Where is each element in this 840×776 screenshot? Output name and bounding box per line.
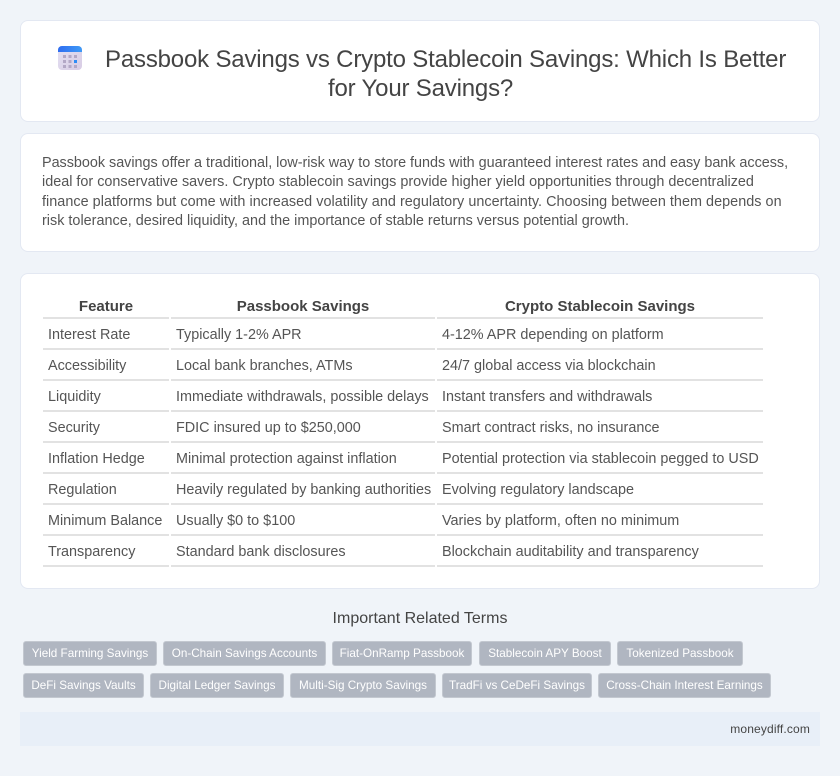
row: regulation: Heavily regulated by banking authorities (176, 482, 431, 498)
table header: Feature (79, 298, 133, 315)
row: interest rate: 4-12% APR depending on platform (442, 327, 664, 343)
row: accessibility: Local bank branches, ATMs (176, 358, 353, 374)
row: minimum balance: Usually $0 to $100 (176, 513, 295, 529)
tag: Fiat-OnRamp Passbook (340, 647, 464, 660)
row: transparency: Standard bank disclosures (176, 544, 346, 560)
row: interest rate: Interest Rate (48, 327, 130, 343)
row: accessibility: Accessibility (48, 358, 126, 374)
row: liquidity: Liquidity (48, 389, 101, 405)
row: liquidity: Immediate withdrawals, possible delays (176, 389, 429, 405)
intro panel (20, 133, 820, 252)
row: liquidity: Instant transfers and withdrawals (442, 389, 652, 405)
row: transparency (48, 544, 699, 560)
tag: Digital Ledger Savings (159, 679, 275, 692)
tag: Tokenized Passbook (626, 647, 734, 660)
row: minimum balance: Varies by platform, often no minimum (442, 513, 679, 529)
intro text: ideal for conservative savers. Crypto stablecoin savings provide higher yield opportunities through decentralized (42, 174, 754, 190)
row: security: Security (48, 420, 100, 436)
row: transparency: Transparency (48, 544, 135, 560)
tag: Multi-Sig Crypto Savings (299, 679, 427, 692)
row: inflation hedge: Inflation Hedge (48, 451, 145, 467)
row: liquidity (48, 389, 652, 405)
intro text (42, 155, 788, 229)
related terms tags (23, 641, 771, 698)
tag (290, 673, 436, 698)
tag (332, 641, 472, 666)
tag: DeFi Savings Vaults (31, 679, 136, 692)
tag (479, 641, 611, 666)
row: transparency: Blockchain auditability and transparency (442, 544, 699, 560)
row: accessibility (48, 358, 656, 374)
tag (598, 673, 771, 698)
tag: Stablecoin APY Boost (488, 647, 602, 660)
row: inflation hedge (48, 451, 759, 467)
footer bar (20, 712, 820, 746)
comparison table (43, 298, 763, 567)
row: inflation hedge: Minimal protection against inflation (176, 451, 397, 467)
row: minimum balance (48, 513, 679, 529)
tag (150, 673, 284, 698)
table header (79, 298, 695, 315)
tag (617, 641, 743, 666)
source credit: moneydiff.com (730, 722, 810, 736)
row: regulation: Evolving regulatory landscape (442, 482, 634, 498)
title: for Your Savings? (328, 75, 513, 102)
tag: Yield Farming Savings (32, 647, 148, 660)
row: security (48, 420, 660, 436)
row: minimum balance: Minimum Balance (48, 513, 162, 529)
row: interest rate (48, 327, 664, 343)
tag (23, 673, 144, 698)
tag (23, 641, 157, 666)
intro text: finance platforms but come with increased volatility and regulatory uncertainty. Choosing between them depends on (42, 194, 782, 210)
intro text: risk tolerance, desired liquidity, and the importance of stable returns versus potential growth. (42, 213, 629, 229)
row: regulation (48, 482, 634, 498)
tag (442, 673, 592, 698)
tag: On-Chain Savings Accounts (172, 647, 317, 660)
tag: TradFi vs CeDeFi Savings (449, 679, 585, 692)
row: interest rate: Typically 1-2% APR (176, 327, 302, 343)
row: regulation: Regulation (48, 482, 117, 498)
row: inflation hedge: Potential protection via stablecoin pegged to USD (442, 451, 759, 467)
icon: calendar (58, 46, 82, 70)
row: security: Smart contract risks, no insurance (442, 420, 660, 436)
table header: Passbook Savings (237, 298, 369, 315)
table header: Crypto Stablecoin Savings (505, 298, 695, 315)
row: accessibility: 24/7 global access via blockchain (442, 358, 656, 374)
tag (163, 641, 326, 666)
title (105, 46, 786, 102)
table panel (20, 273, 820, 589)
intro text: Passbook savings offer a traditional, low-risk way to store funds with guaranteed interest rates and easy bank access, (42, 155, 788, 171)
tag: Cross-Chain Interest Earnings (606, 679, 763, 692)
title: Passbook Savings vs Crypto Stablecoin Savings: Which Is Better (105, 46, 786, 73)
row: security: FDIC insured up to $250,000 (176, 420, 361, 436)
header panel (20, 20, 820, 122)
related terms heading: Important Related Terms (333, 610, 507, 627)
